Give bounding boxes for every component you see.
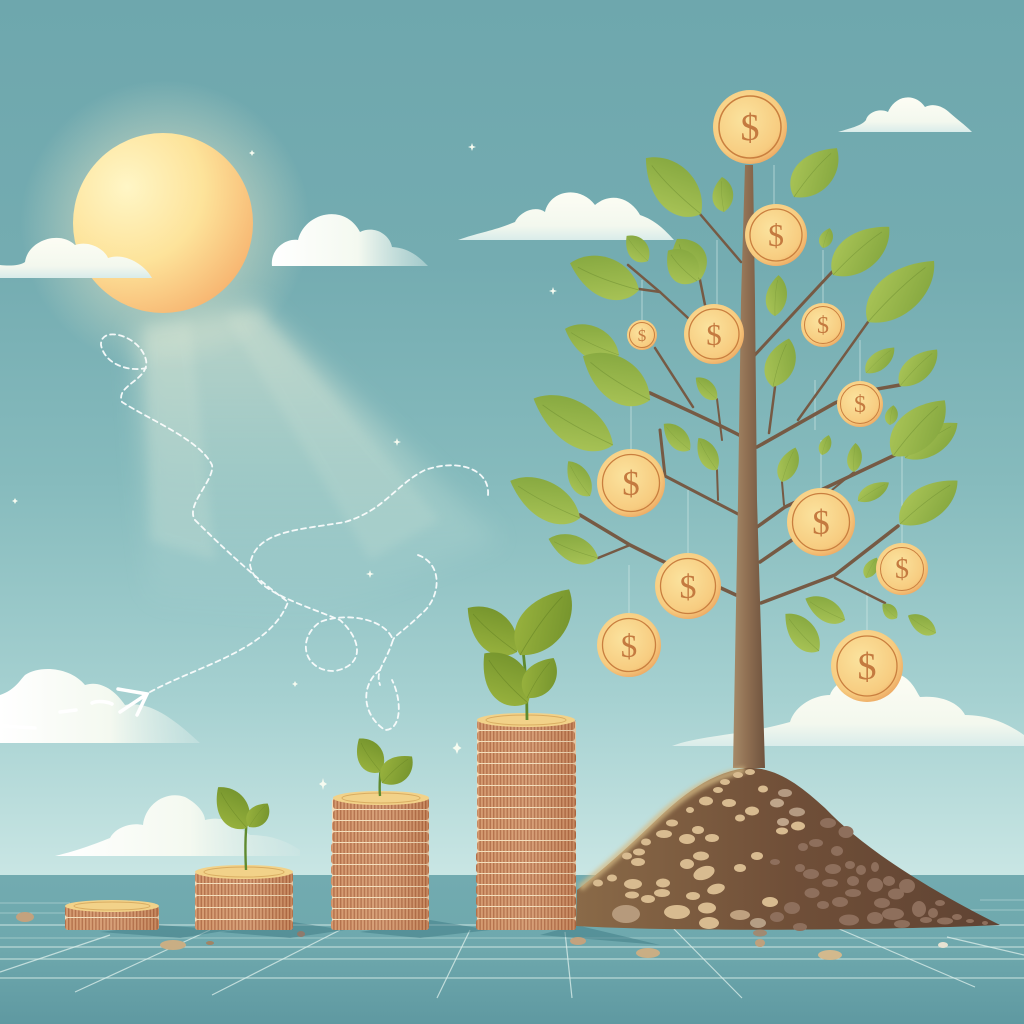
scattered stones: [16, 912, 948, 960]
cloud: upper middle: [272, 214, 428, 266]
dashed growth path: [101, 334, 488, 730]
pebbles: dark: [750, 818, 988, 931]
cloud: lower right: [672, 672, 1024, 746]
sun glow: [20, 80, 310, 370]
sprout medium: [348, 732, 421, 796]
sun: [73, 133, 253, 313]
coin: lower left: $: [621, 629, 637, 665]
coin: left mid: [597, 449, 665, 517]
sparkles: [12, 143, 557, 790]
cloud: lower left: [0, 669, 200, 743]
coin stack 4: [476, 713, 576, 930]
coin stack 2: [195, 865, 293, 930]
coin: lower right: [831, 630, 903, 702]
coin: upper left: [684, 304, 744, 364]
coin: right center: $: [812, 503, 830, 542]
coin: top: [713, 90, 787, 164]
coin: upper right: $: [768, 217, 784, 253]
leaves: [502, 136, 968, 660]
pebbles: light: [593, 769, 805, 929]
ground plane: [0, 875, 1024, 1024]
coin: far right: [876, 543, 928, 595]
tree: [502, 90, 968, 768]
coin: right mid: [837, 381, 883, 427]
cloud: behind small stack: [55, 795, 300, 856]
sun rays: [135, 305, 500, 620]
coin: left mid: $: [622, 464, 640, 503]
cloud: upper right: [838, 97, 972, 132]
coin stack 1: [65, 900, 159, 930]
cloud: upper left: [0, 238, 152, 278]
coin: small right: [801, 303, 845, 347]
sprout large: [455, 576, 587, 720]
coin stack 3: [331, 791, 429, 930]
coin hanging threads: [629, 165, 902, 632]
coin: upper right: [745, 204, 807, 266]
coin: far right: $: [895, 554, 909, 585]
soil mound: [576, 768, 1000, 931]
coin: lower right: $: [858, 646, 876, 688]
trunk: [733, 165, 765, 768]
stack shadows: [100, 920, 660, 945]
arrow head: [0, 689, 147, 728]
sprout small: [206, 779, 275, 870]
coin: right center: [787, 488, 855, 556]
coin: right mid: $: [854, 392, 866, 418]
coin: upper left: $: [706, 317, 722, 352]
coin: small right: $: [817, 313, 829, 339]
coin: small left: $: [638, 326, 646, 345]
coin: lower left: [597, 613, 661, 677]
coin: small left: [627, 320, 657, 350]
coin: top: $: [740, 107, 760, 149]
branches: [580, 214, 900, 603]
coin: lower center: [655, 553, 721, 619]
cloud: center top: [458, 192, 674, 240]
coin: lower center: $: [680, 569, 696, 606]
